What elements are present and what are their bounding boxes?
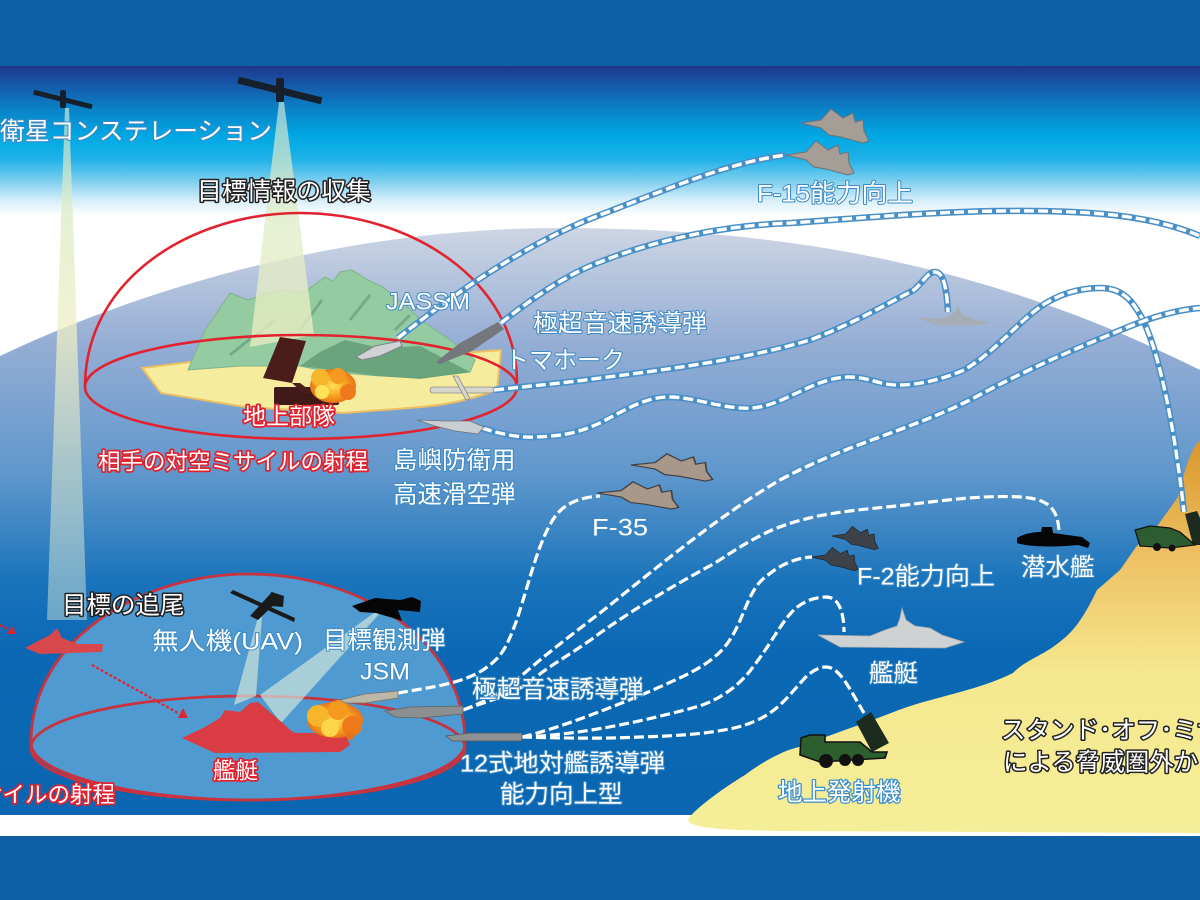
wheels [819, 754, 864, 768]
label: satellite constellation: 衛星コンステレーション [0, 118, 272, 146]
flight path: ship [522, 597, 844, 737]
enemy ship large [182, 702, 350, 753]
F-2 fighters [812, 526, 878, 571]
label: type 12 missile: 能力向上型 [500, 780, 622, 808]
label: JASSM: JASSM [386, 288, 470, 316]
explosion on ship [307, 700, 363, 740]
enemy air defence dome: island [85, 213, 517, 439]
flight path: long-range upper section [780, 308, 1200, 480]
enemy air defence dome: ships [31, 574, 465, 800]
truck body [800, 735, 887, 762]
flight path: F-2 [522, 557, 812, 737]
label: submarine: 潜水艦 [1021, 554, 1094, 582]
UAV [230, 590, 295, 622]
label: target info collection: 目標情報の収集 [197, 178, 371, 206]
island mountain [188, 270, 475, 378]
friendly destroyer [818, 608, 964, 648]
label: stand-off missile summary [1001, 718, 1200, 776]
explosion on island [310, 368, 356, 403]
glide weapon missile [417, 420, 484, 434]
mountain ridges [230, 295, 410, 355]
label: JSM: JSM [360, 658, 410, 686]
label: F-35: F-35 [592, 514, 648, 542]
satellite right [237, 77, 322, 104]
launcher pod upper [1185, 511, 1200, 545]
wheels upper [1153, 543, 1176, 552]
JASSM missile [356, 341, 402, 360]
label: island defence glide weapon [393, 446, 516, 508]
label: enemy ship: 艦艇 [213, 758, 258, 784]
all text labels [0, 118, 1200, 808]
label: hypersonic missile upper: 極超音速誘導弾 [533, 310, 707, 338]
label: Tomahawk: トマホーク [505, 348, 625, 374]
ground launcher vehicle: coast [800, 712, 889, 768]
label: type 12 missile: 12式地対艦誘導弾 [460, 750, 665, 778]
beam: satellite constellation to tracked target [47, 108, 87, 620]
flight path: hypersonic missile upper [501, 211, 1200, 323]
red dotted arrow: enemy ship movement [92, 665, 188, 718]
label: island defence glide weapon: 高速滑空弾 [393, 480, 516, 508]
label: hypersonic missile lower: 極超音速誘導弾 [472, 676, 644, 704]
label: target tracking: 目標の追尾 [62, 592, 184, 620]
F-35 fighters [597, 454, 713, 509]
red dotted arrow: incoming left [0, 625, 16, 634]
ground launcher vehicle: upper right [1135, 511, 1200, 552]
home coast land [688, 440, 1200, 833]
beam: UAV observation [234, 617, 262, 705]
enemy air defence launcher [263, 337, 339, 405]
label: ground forces: 地上部隊 [243, 404, 335, 430]
island sand [142, 350, 501, 413]
label: type 12 missile [460, 750, 665, 808]
flight path: JASSM from F-15 [398, 155, 786, 338]
far destroyer [918, 305, 990, 325]
Tomahawk missile [430, 376, 494, 400]
hypersonic missile lower [385, 706, 463, 718]
bottom band [0, 836, 1200, 900]
hypersonic missile upper [436, 322, 504, 364]
earth and ocean [0, 228, 1200, 815]
submarine [1017, 527, 1090, 548]
top band [0, 0, 1200, 66]
satellite left [33, 90, 93, 109]
white horizon area [0, 216, 1200, 836]
label: observation missile: 目標観測弾 [323, 626, 446, 654]
label: island defence glide weapon: 島嶼防衛用 [393, 446, 516, 474]
truck body upper [1135, 526, 1195, 548]
observation missile silhouette [352, 597, 421, 621]
flight paths: upper with casing [398, 155, 1200, 512]
flight path: submarine [463, 497, 1059, 710]
enemy island [142, 270, 501, 413]
launcher pod [856, 712, 889, 752]
label: UAV: 無人機(UAV) [152, 628, 303, 656]
flight path: ground launcher [522, 667, 864, 738]
F-15 fighters [786, 109, 869, 175]
flight path: island defence glide weapon [482, 288, 1184, 512]
flight paths: lower [398, 480, 1059, 738]
label: F-2 upgrade: F-2能力向上 [857, 562, 995, 590]
label: friendly ship: 艦艇 [869, 660, 918, 688]
label: F-15 upgrade: F-15能力向上 [757, 180, 913, 208]
beam: target information collection [250, 102, 314, 347]
label: ground launcher: 地上発射機 [778, 778, 900, 806]
flight path: to long range [463, 480, 780, 710]
type 12 missile [446, 733, 522, 741]
mountain shadow [300, 340, 470, 379]
label: enemy air defence range: 相手の対空ミサイルの射程 [98, 450, 368, 474]
flight path: Tomahawk from ship [494, 272, 948, 390]
flight path: JSM from F-35 [398, 496, 600, 693]
beam: observation missile [260, 613, 380, 723]
sky [0, 66, 1200, 216]
enemy ship small [25, 628, 103, 654]
JSM missile [340, 691, 398, 703]
